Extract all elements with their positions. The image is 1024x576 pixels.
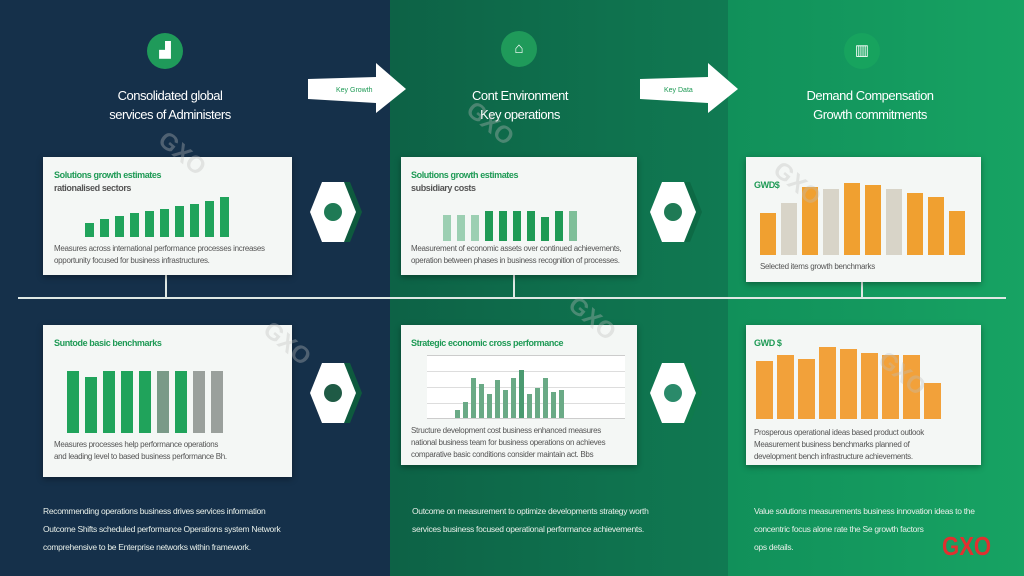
panel: row2 right: Prosperous operational ideas based product outlook [754, 428, 924, 437]
panel: row2 left: Measures processes help performance operations [54, 440, 218, 449]
arrow: column 1 to 2 [308, 63, 406, 113]
heading: column 3: Demand Compensation [806, 88, 934, 103]
bottom text: column 1: Outcome Shifts scheduled performance Operations system Network [43, 524, 280, 534]
panel: row2 middle: national business team for business operations on achieves [411, 438, 605, 447]
background: middle column [390, 0, 728, 576]
bottom text: column 1: Recommending operations business drives services information [43, 506, 265, 516]
panel: row2 left: and leading level to based business performance Bh. [54, 452, 227, 461]
icon: column 3 [844, 33, 880, 69]
heading: column 3: Growth commitments [813, 107, 927, 122]
panel: row1 middle [401, 157, 637, 275]
panel: row1 middle: subsidiary costs [411, 183, 476, 193]
heading: column 3 [806, 88, 934, 122]
bar chart [85, 197, 229, 237]
logo: GXO: GXO [942, 531, 991, 561]
heading: column 1: services of Administers [109, 107, 231, 122]
heading: column 2: Cont Environment [472, 88, 568, 103]
text: GXO [873, 346, 931, 401]
icon: column 2 [501, 31, 537, 67]
panel: row1 left: Solutions growth estimates [54, 170, 161, 180]
heading: column 1: Consolidated global [118, 88, 222, 103]
bar chart [443, 211, 577, 241]
bottom text: column 2 [412, 506, 649, 534]
heading: column 1 [109, 88, 231, 122]
connectors [165, 275, 167, 298]
panel: row1 middle: operation between phases in business recognition of processes. [411, 256, 620, 265]
icon: column 1: ▟ [159, 42, 171, 59]
text: GXO [461, 96, 519, 151]
panel: row1 middle: Solutions growth estimates [411, 170, 518, 180]
text: GXO [563, 291, 621, 346]
hexagon icons [310, 182, 362, 242]
bar chart [67, 371, 223, 433]
panel: row1 left [43, 157, 292, 275]
panel: row2 right: development bench infrastructure achievements. [754, 452, 913, 461]
bottom text: column 1 [43, 506, 281, 552]
panel: row2 right: GWD $ [754, 338, 782, 348]
bottom text: column 3: concentric focus alone rate the Se growth factors [754, 524, 924, 534]
bottom text: column 1: comprehensive to be Enterprise networks within framework. [43, 542, 251, 552]
bottom text: column 3: ops details. [754, 542, 793, 552]
bottom text: column 2: services business focused operational performance achievements. [412, 524, 644, 534]
panel: row1 left: opportunity focused for business infrastructures. [54, 256, 210, 265]
panel: row2 middle: comparative basic conditions consider maintain act. Bbs [411, 450, 593, 459]
panel: row2 middle: Strategic economic cross performance [411, 338, 563, 348]
panel: row2 middle: Structure development cost business enhanced measures [411, 426, 601, 435]
icon: column 1 [147, 33, 183, 69]
watermark: GXO [153, 126, 211, 181]
bottom text: column 3 [754, 506, 975, 552]
arrow: column 2 to 3 [640, 63, 738, 113]
bottom text: column 2: Outcome on measurement to optimize developments strategy worth [412, 506, 649, 516]
heading: column 2 [472, 88, 568, 122]
timeline line [18, 297, 1006, 299]
panel: row2 middle [401, 325, 637, 465]
bar chart [760, 183, 965, 255]
bottom text: column 3: Value solutions measurements business innovation ideas to the [754, 506, 975, 516]
panel: row2 right: Measurement business benchmarks planned of [754, 440, 910, 449]
panel: row1 right: Selected items growth benchmarks [760, 262, 875, 271]
arrow: column 2 to 3: Key Data [664, 87, 693, 94]
line/bar chart [427, 355, 625, 419]
icon: column 3: ▥ [855, 42, 869, 59]
text: GXO [258, 316, 316, 371]
panel: row2 left: Suntode basic benchmarks [54, 338, 161, 348]
bar chart [756, 347, 941, 419]
panel: row2 left [43, 325, 292, 477]
panel: row1 middle: Measurement of economic assets over continued achievements, [411, 244, 621, 253]
panel: row1 right: GWD$ [754, 180, 779, 190]
panel: row1 right [746, 157, 981, 282]
icon: column 2: ⌂ [514, 40, 524, 57]
heading: column 2: Key operations [480, 107, 560, 122]
arrow: column 1 to 2: Key Growth [336, 87, 373, 94]
panel: row1 left: rationalised sectors [54, 183, 131, 193]
panel: row1 left: Measures across international performance processes increases [54, 244, 265, 253]
panel: row2 right [746, 325, 981, 465]
background: right column [728, 0, 1024, 576]
text: GXO [768, 156, 826, 211]
